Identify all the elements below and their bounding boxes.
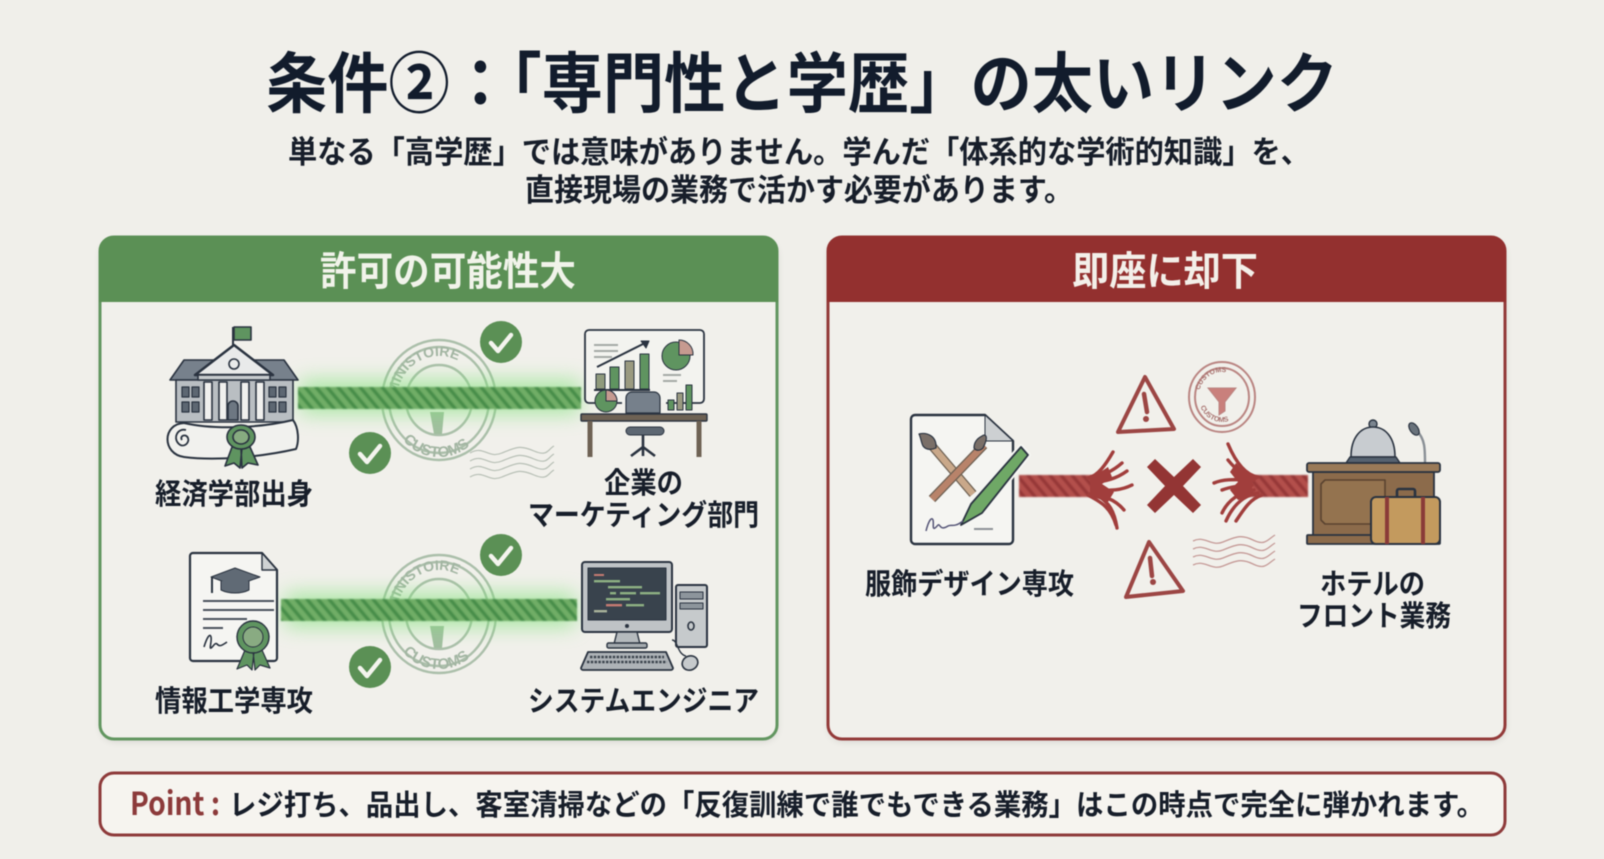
wavy postmark — [1193, 535, 1275, 567]
panel: immediately rejected — [826, 234, 1508, 744]
icon: hotel front desk — [1307, 420, 1440, 544]
label: 企業のマーケティング部門: マーケティング部門 — [528, 499, 759, 532]
icon: design document with pen — [911, 415, 1028, 544]
icon: university and diploma — [168, 327, 298, 468]
subtitle — [288, 135, 1310, 208]
icon: warning top — [1118, 377, 1174, 432]
heading: 許可の可能性大: 許可の可能性大 — [320, 250, 576, 294]
icon: check — [349, 432, 391, 474]
panel header: red — [827, 236, 1506, 302]
label: ホテルのフロント業務: ホテルの — [1320, 569, 1425, 601]
label: ホテルのフロント業務: フロント業務 — [1297, 600, 1451, 633]
label: システムエンジニア: システムエンジニア — [528, 686, 759, 718]
icon: certificate — [190, 553, 277, 670]
heading: 即座に却下: 即座に却下 — [1072, 250, 1258, 294]
point text: レジ打ち、品出し、客室清掃などの「反復訓練で誰でもできる業務」はこの時点で完全に弾かれます。 — [229, 789, 1484, 822]
icon: computer — [581, 562, 707, 673]
label: 情報工学専攻: 情報工学専攻 — [155, 685, 313, 718]
subtitle: 単なる「高学歴」では意味がありません。学んだ「体系的な学術的知識」を、 — [288, 135, 1310, 170]
stamp: customs: CUSTOMS — [405, 646, 468, 670]
link row 2 — [278, 533, 581, 689]
title: 条件②：「専門性と学歴」の太いリンク — [266, 47, 1338, 121]
connection: frayed red rope left — [1019, 452, 1132, 528]
label: 企業のマーケティング部門 — [528, 467, 759, 532]
icon: check — [349, 646, 391, 688]
icon: marketing desk — [581, 330, 707, 457]
label: ホテルのフロント業務 — [1297, 569, 1451, 633]
label: 経済学部出身: 経済学部出身 — [155, 478, 313, 511]
connection: green rope — [281, 593, 577, 627]
link row 1 — [294, 320, 590, 480]
icon: check — [480, 321, 522, 363]
callout: point — [100, 773, 1505, 835]
connection: green rope — [298, 380, 581, 414]
connection: frayed red rope right — [1214, 444, 1308, 521]
subtitle: 直接現場の業務で活かす必要があります。 — [525, 173, 1073, 208]
stamp: customs: MINISTOIRE — [390, 560, 461, 600]
stamp: customs — [381, 338, 497, 462]
stamp: customs: MINISTOIRE — [390, 347, 459, 388]
stamp: customs — [381, 553, 497, 675]
point label: Point : — [130, 779, 220, 825]
label: 企業のマーケティング部門: 企業の — [604, 467, 683, 500]
stamp: funnel — [1187, 360, 1257, 434]
stamp: funnel: CUSTOMS — [1200, 405, 1229, 422]
icon: check — [480, 534, 522, 576]
stamp: customs: CUSTOMS — [404, 434, 469, 458]
panel header: green — [99, 236, 778, 302]
panel: permission likely — [98, 234, 780, 744]
icon: red cross — [1147, 459, 1201, 513]
wavy postmark — [470, 446, 554, 479]
icon: warning bottom — [1126, 542, 1183, 597]
label: 服飾デザイン専攻: 服飾デザイン専攻 — [865, 567, 1074, 601]
stamp: funnel: CUSTOMS — [1195, 367, 1226, 390]
